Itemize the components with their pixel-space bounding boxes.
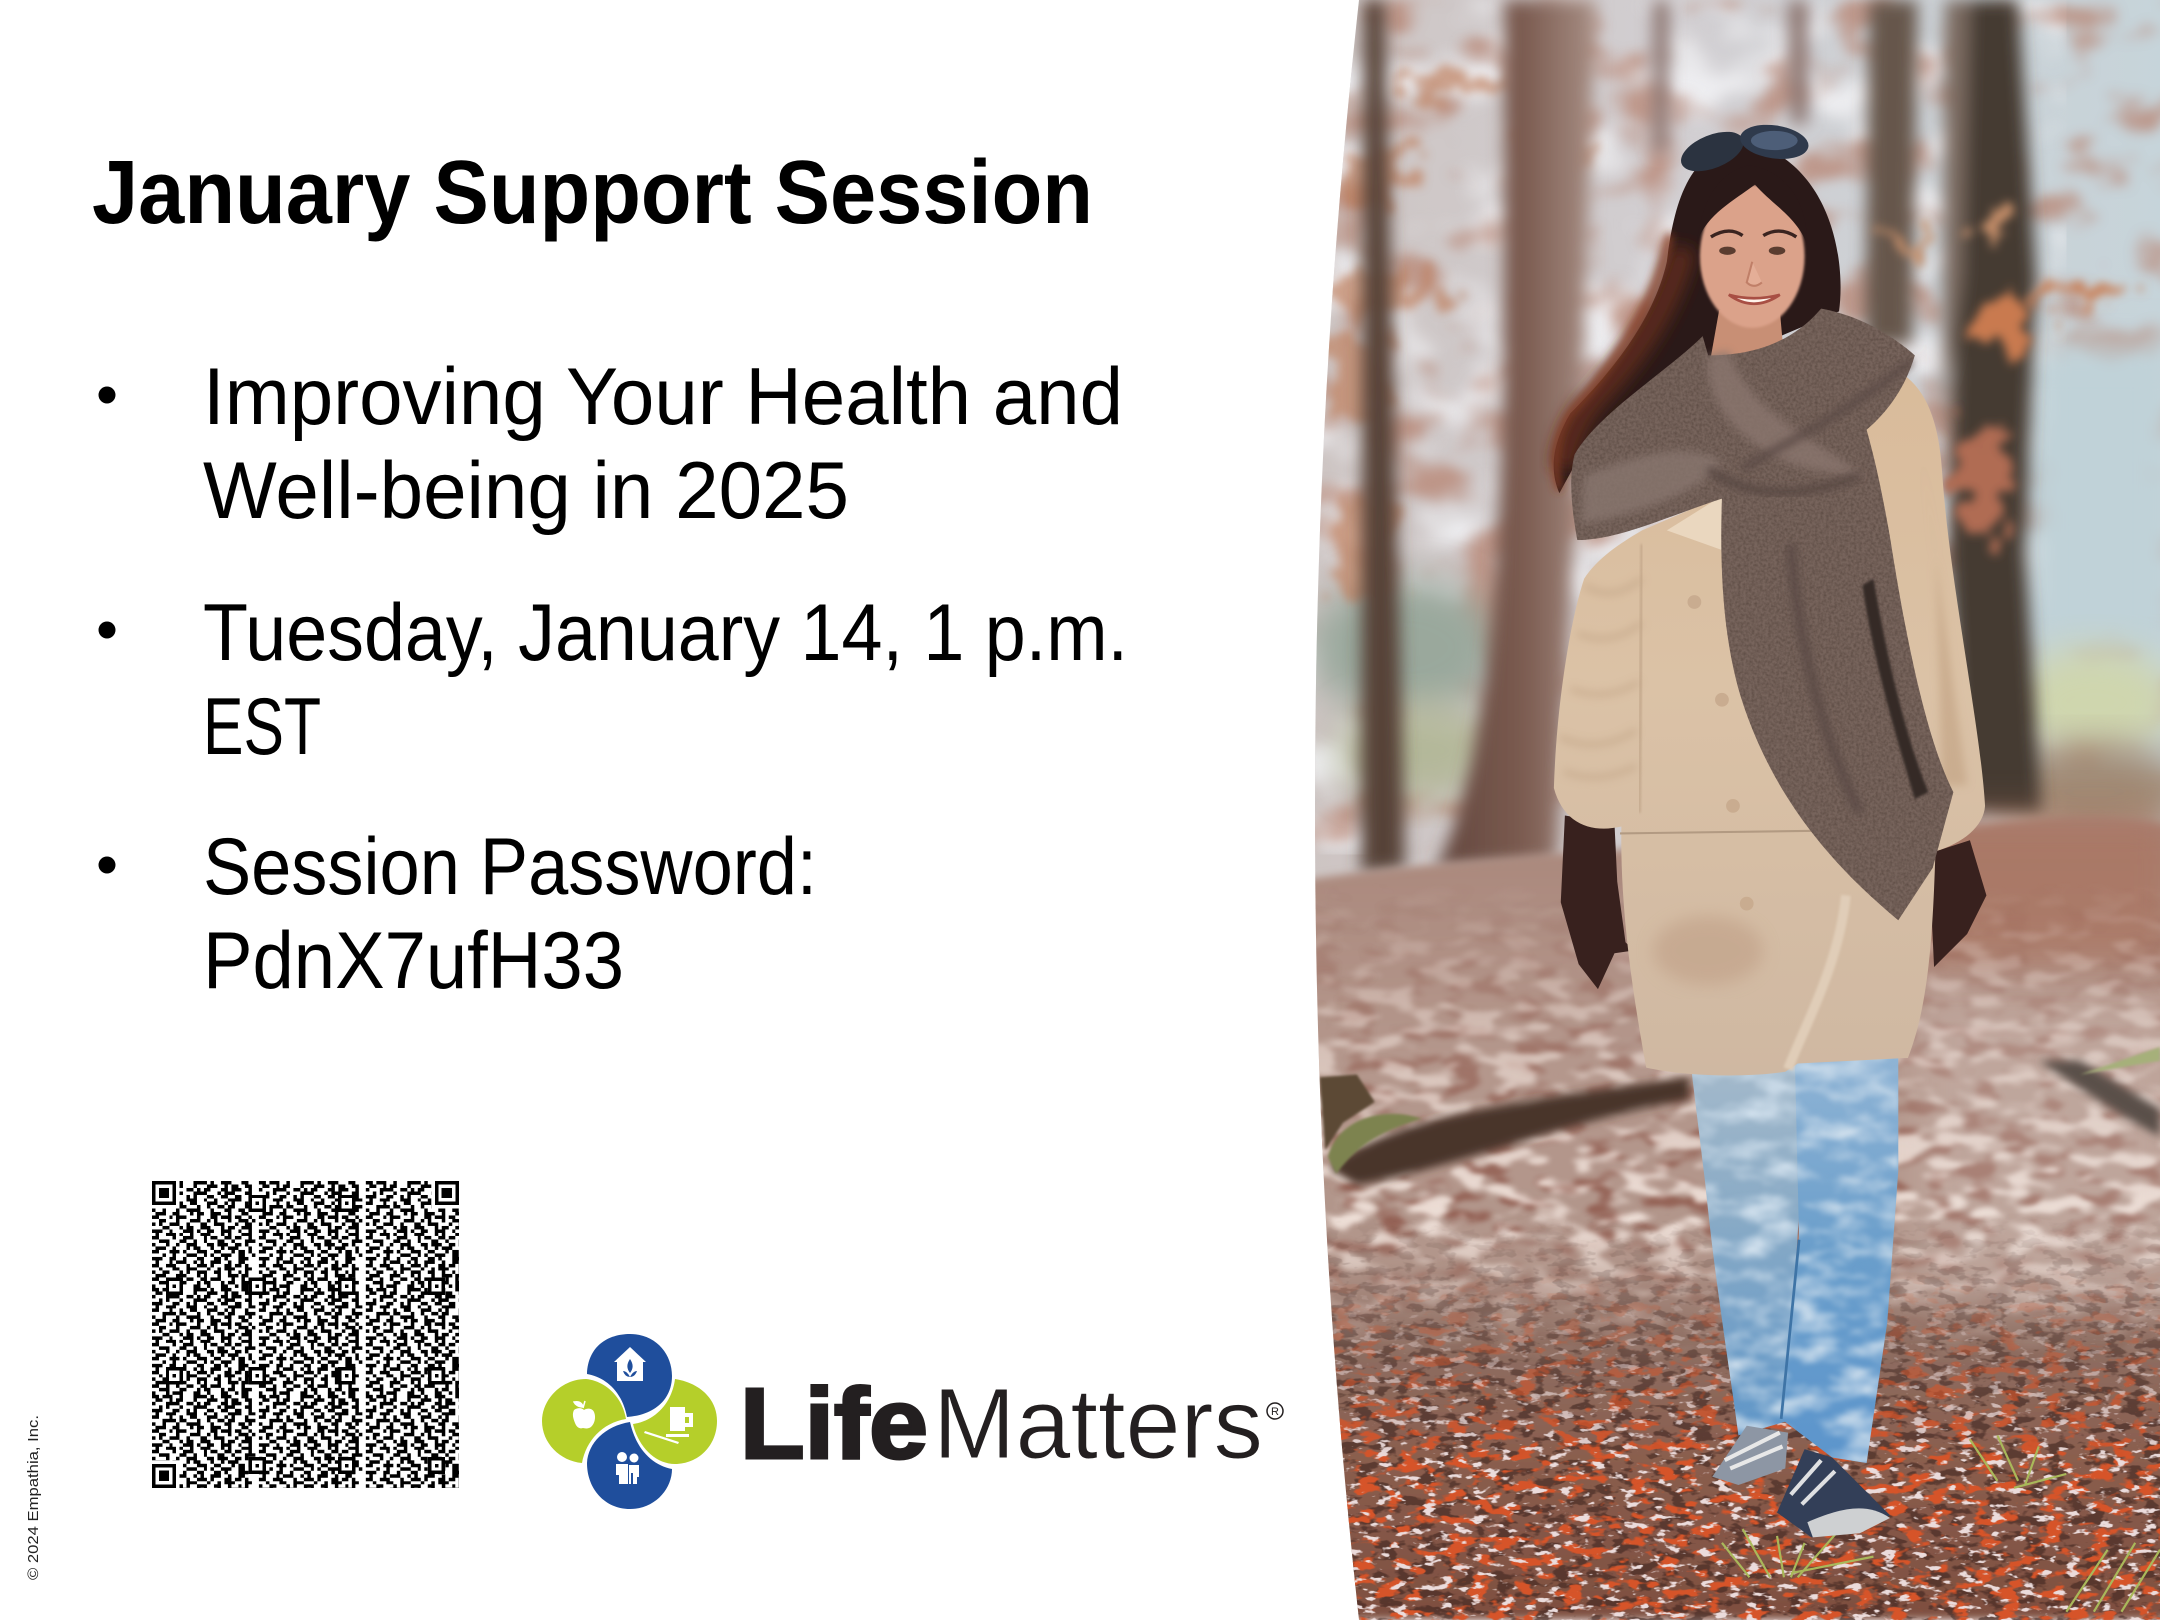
hair <box>1554 142 1841 493</box>
bullet 1: topic: Well-being in 2025 <box>203 446 849 536</box>
logo wordmark: Matters <box>933 1368 1263 1480</box>
leaf: bottom blue with people icon <box>587 1422 672 1509</box>
woman figure <box>1554 121 1986 1537</box>
coat details <box>1559 455 1967 1069</box>
face <box>1698 184 1806 328</box>
bullet 2: date and time: EST <box>203 682 321 772</box>
copyright note: © 2024 Empathia, Inc. <box>26 1415 42 1580</box>
title: January Support Session <box>92 143 1093 243</box>
scarf <box>1571 309 1953 920</box>
gloves <box>1561 816 1986 989</box>
leaf: left green with apple icon <box>542 1379 626 1463</box>
bullet 1: topic <box>98 352 1123 536</box>
leaf: right green with mug icon <box>633 1379 717 1464</box>
bullet 3: session password: PdnX7ufH33 <box>203 916 624 1006</box>
forest background <box>1295 0 2160 909</box>
sunglasses <box>1681 124 1808 172</box>
logo wordmark: R <box>1271 1406 1279 1418</box>
QR code <box>152 1181 459 1488</box>
forest floor <box>1295 813 2160 1620</box>
grass tufts <box>1722 1435 2160 1612</box>
photo: woman walking in autumn forest <box>1295 0 2160 1620</box>
bullet 2: date and time <box>98 588 1128 772</box>
leaf: top blue with house icon <box>587 1334 672 1417</box>
bullet 3: session password <box>98 822 817 1006</box>
shoes <box>1712 1426 1890 1537</box>
logo: LifeMatters <box>542 1334 1283 1509</box>
coat <box>1554 369 1985 1075</box>
bullet 3: session password: Session Password: <box>203 822 817 912</box>
bullet 2: date and time: Tuesday, January 14, 1 p.m. <box>203 588 1128 678</box>
logo mark <box>542 1334 717 1509</box>
jeans <box>1692 1037 1898 1463</box>
bullet 1: topic: Improving Your Health and <box>203 352 1123 442</box>
logo wordmark <box>740 1368 1283 1480</box>
neck <box>1711 310 1782 356</box>
logo wordmark: Life <box>740 1368 928 1480</box>
bullet list <box>98 352 1128 1006</box>
